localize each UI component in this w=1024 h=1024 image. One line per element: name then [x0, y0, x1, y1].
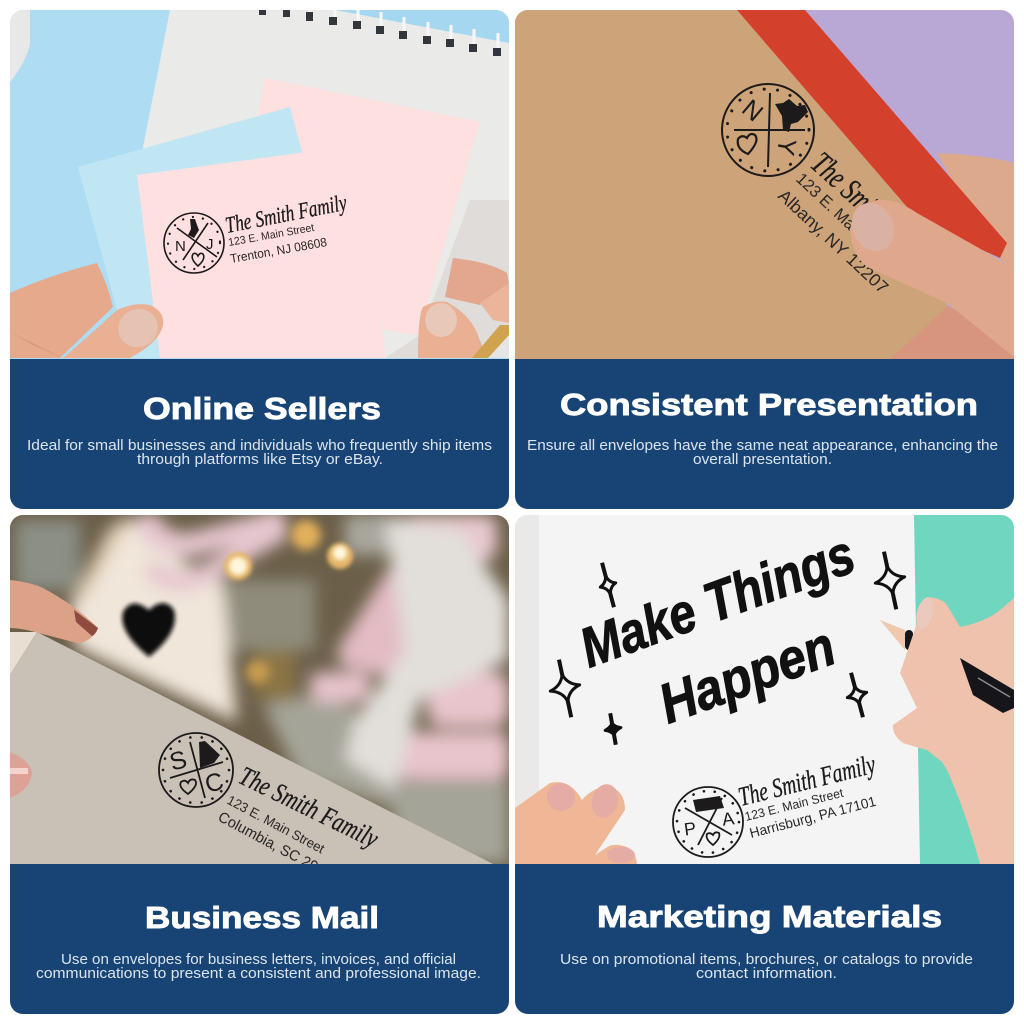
panel: consistent presentation — [515, 10, 1014, 509]
text: marketing materials description: Use on promotional items, brochures, or catalogs to provide — [560, 952, 973, 968]
band: business mail — [10, 864, 509, 1014]
blurred background objects — [15, 515, 509, 864]
text: online sellers description — [27, 438, 492, 468]
text: stamp address — [738, 756, 876, 838]
icon: state stamp NJ: N — [175, 238, 186, 255]
text: stamp address: 123 E. Main Street — [792, 170, 904, 275]
heading: online sellers: Online Sellers — [143, 391, 381, 426]
text: stamp address: 123 E. Main Street — [227, 222, 315, 249]
text: stamp address: Harrisburg, PA 17101 — [748, 793, 878, 841]
heading: business mail: Business Mail — [145, 900, 379, 935]
icon: right hand — [418, 258, 509, 358]
icon: thumb — [844, 196, 1014, 357]
icon: left hand — [10, 263, 165, 358]
text: stamp address: Albany, NY 12207 — [774, 185, 892, 297]
icon: state stamp PA: P — [683, 818, 697, 840]
icon: state stamp NY — [722, 84, 814, 176]
text: consistent presentation description — [527, 438, 998, 468]
heading: marketing materials: Marketing Materials — [597, 899, 942, 934]
text: business mail description: communications to present a consistent and professional image. — [36, 966, 481, 982]
icon: heart cutout — [122, 603, 175, 657]
text: stamp address: 123 E. Main Street — [225, 792, 327, 856]
photo: kraft envelope with stamp — [515, 10, 1014, 359]
band: marketing materials — [515, 864, 1014, 1014]
text: stamp address — [226, 195, 346, 262]
photo: pink notes with stamp — [10, 10, 509, 359]
panel: online sellers — [10, 10, 509, 509]
text: stamp address: Trenton, NJ 08608 — [229, 235, 328, 266]
icon: state stamp NY: Y — [771, 136, 801, 158]
text: online sellers description: through platforms like Etsy or eBay. — [137, 452, 383, 468]
text: marketing materials description — [560, 952, 973, 982]
text: stamp address: The Smith Family — [804, 144, 951, 282]
icon: state stamp PA: A — [721, 808, 735, 830]
text: make things happen: Make Things — [572, 522, 863, 679]
icon: state stamp NJ: J — [206, 236, 214, 253]
text: stamp address: The Smith Family — [234, 760, 383, 854]
icon: writing hand — [880, 595, 1014, 864]
icon: state stamp SC: C — [202, 767, 227, 799]
heading: consistent presentation: Consistent Presentation — [560, 387, 978, 422]
icon: state stamp SC: S — [167, 745, 190, 777]
text: stamp address: The Smith Family — [735, 749, 878, 812]
text: online sellers description: Ideal for small businesses and individuals who frequently ship items — [27, 438, 492, 454]
icon: lower fingers — [890, 305, 1014, 359]
text: stamp address — [219, 766, 378, 864]
text: stamp address: Columbia, SC 29201 — [215, 809, 342, 887]
text: stamp address: 123 E. Main Street — [743, 786, 845, 824]
icon: hand top — [10, 580, 98, 643]
icon: state stamp SC — [159, 733, 233, 807]
text: business mail description — [36, 952, 481, 982]
icon: state stamp PA — [673, 787, 743, 857]
icon: state stamp NJ — [164, 213, 224, 273]
icon: fingers — [515, 781, 637, 864]
band: consistent presentation — [515, 359, 1014, 509]
panel: marketing materials — [515, 515, 1014, 1014]
icon: upper fingers — [937, 153, 1014, 270]
icon: spiral rings — [259, 10, 501, 56]
icon: sparkles — [544, 549, 911, 746]
text: consistent presentation description: Ensure all envelopes have the same neat appearance, enhancing the — [527, 438, 998, 454]
text: stamp address: The Smith Family — [223, 190, 349, 238]
photo: poster with stamp — [515, 515, 1014, 864]
icon: state stamp NY: N — [736, 94, 768, 127]
panel: business mail — [10, 515, 509, 1014]
text: make things happen — [582, 544, 854, 724]
text: make things happen: Happen — [651, 614, 843, 735]
text: business mail description: Use on envelopes for business letters, invoices, and official — [61, 952, 456, 968]
text: marketing materials description: contact information. — [696, 966, 837, 982]
text: consistent presentation description: overall presentation. — [693, 452, 832, 468]
photo: card on blurred background — [10, 515, 509, 887]
band: online sellers — [10, 359, 509, 509]
bokeh lights — [224, 520, 353, 684]
icon: hand bottom — [10, 752, 32, 798]
